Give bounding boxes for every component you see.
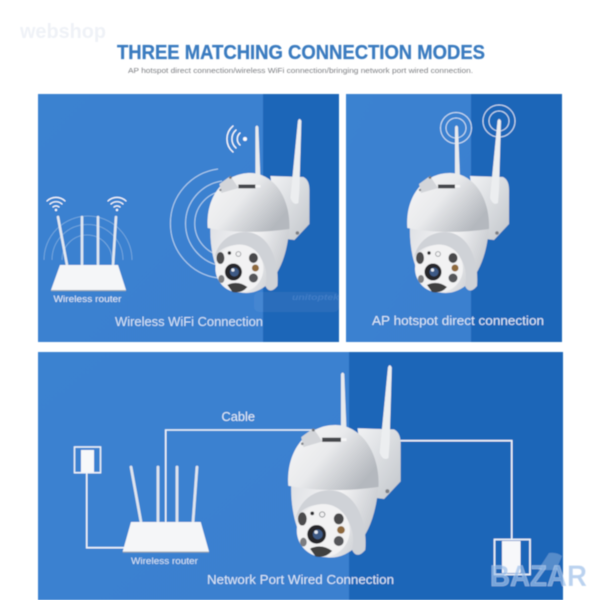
label: AP hotspot direct connection: AP hotspot direct connection [372, 313, 544, 328]
label: wireless router: Wireless router [131, 556, 198, 566]
router signal arcs [44, 216, 132, 260]
icon: router WiFi left [47, 197, 65, 211]
WiFi signal rings beside camera [170, 169, 222, 278]
title: THREE MATCHING CONNECTION MODES [117, 42, 485, 64]
right wall socket [494, 540, 530, 574]
subtitle: AP hotspot direct connection/wireless WiFi connection/bringing network port wired connection. [128, 66, 473, 75]
left wall socket [74, 447, 100, 473]
camera [208, 119, 309, 293]
router [123, 467, 209, 553]
label: Wireless WiFi Connection: Wireless WiFi Connection [115, 314, 263, 329]
panel: wireless WiFi connection [38, 94, 341, 342]
cable lines [87, 430, 512, 548]
label: wireless router: Wireless router [54, 294, 122, 305]
panel: network port wired connection [38, 352, 563, 600]
watermark: BAZAR: BAZAR [490, 560, 587, 593]
watermark: webshop: webshop [19, 21, 106, 43]
watermark: unitoptek: unitoptek [292, 292, 341, 302]
router [51, 217, 126, 291]
label: Cable: Cable [222, 410, 255, 424]
icon: camera WiFi signal [227, 126, 247, 152]
watermark: unitoptek [254, 292, 341, 312]
panel: AP hotspot direct connection [346, 94, 562, 342]
label: Network Port Wired Connection: Network Port Wired Connection [207, 573, 394, 587]
icon: router WiFi right [108, 197, 126, 211]
camera [407, 119, 509, 293]
camera [288, 365, 401, 558]
AP signal rings [440, 105, 515, 144]
